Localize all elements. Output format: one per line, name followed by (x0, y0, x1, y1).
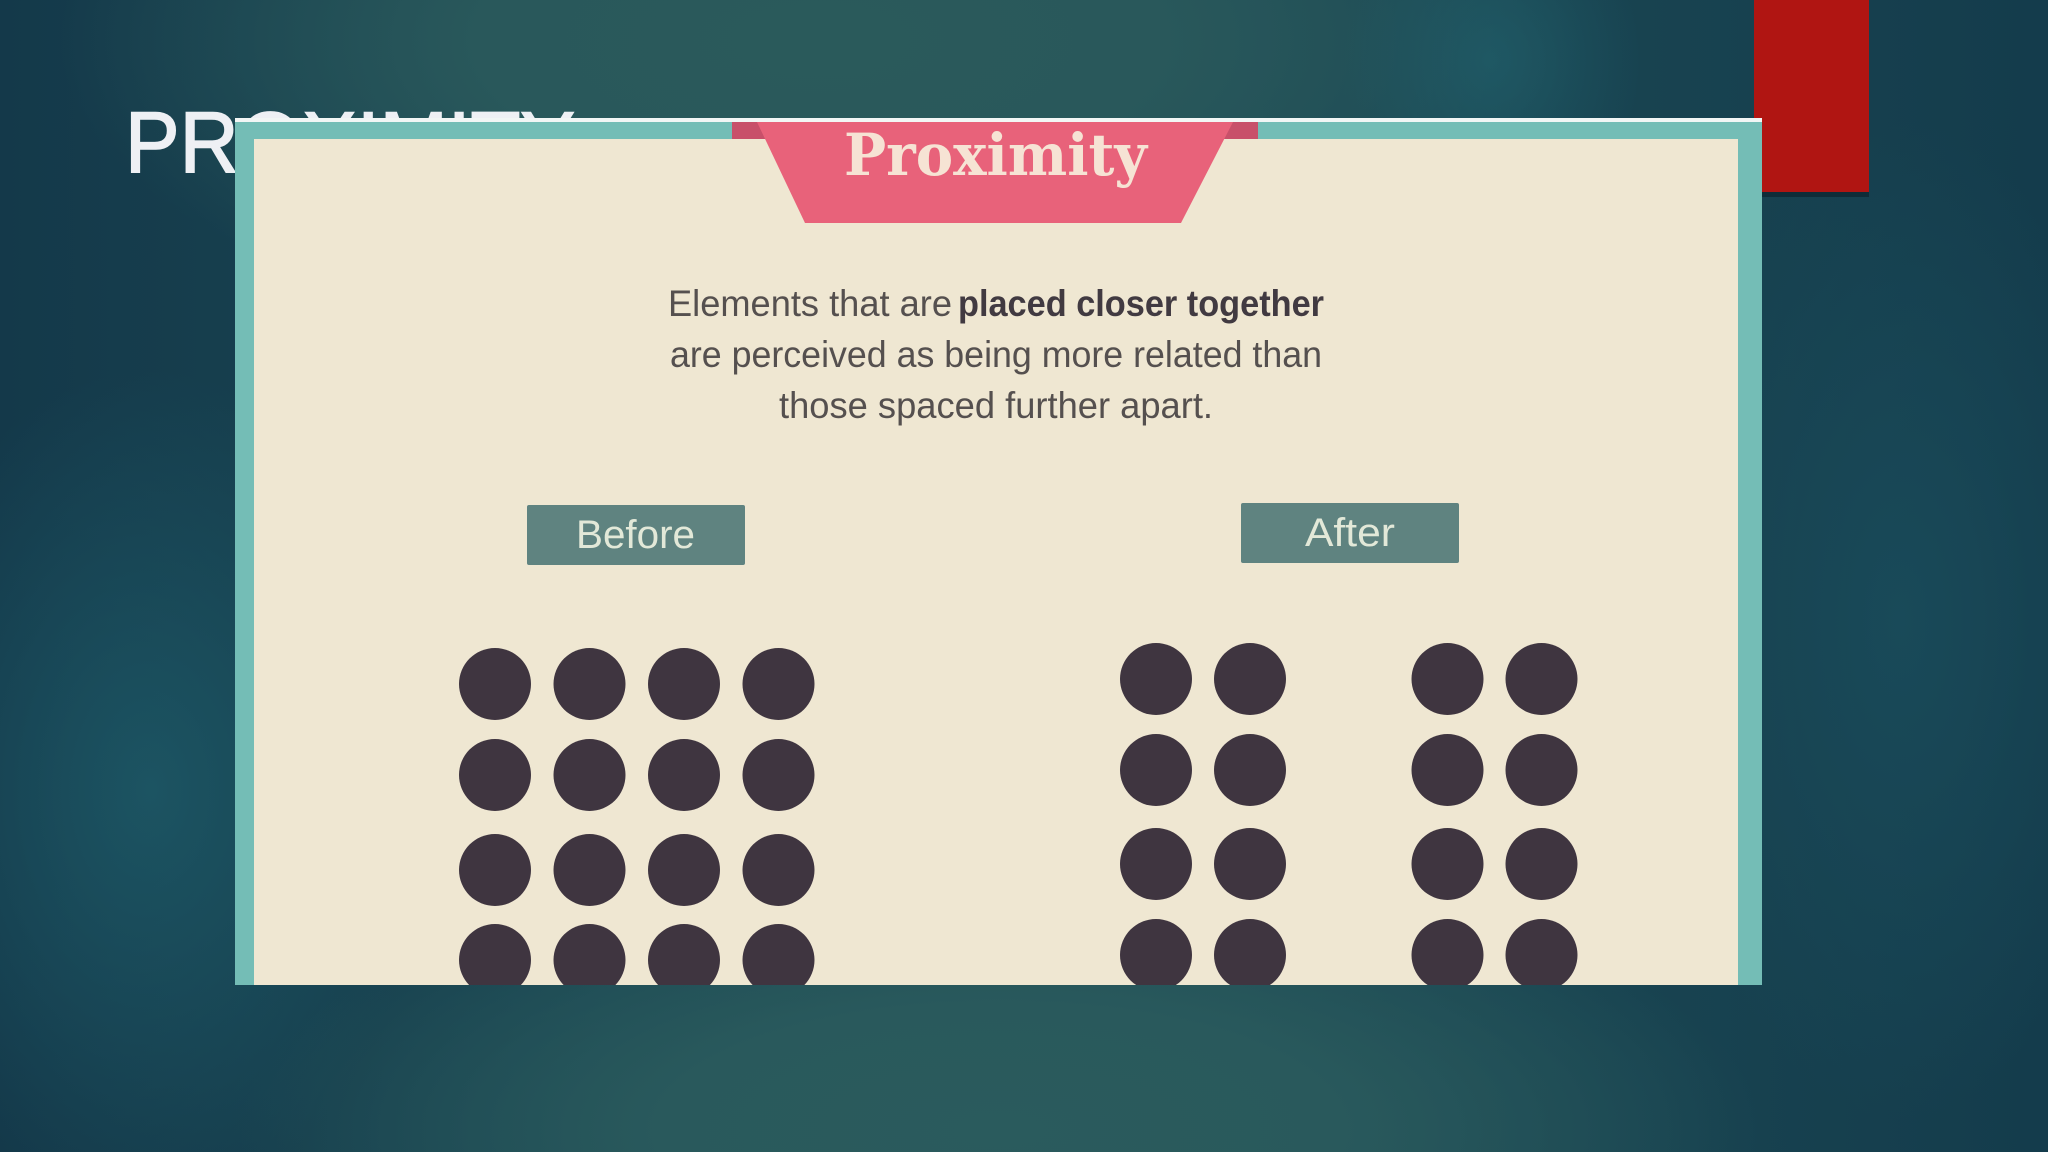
label: after: After (1305, 511, 1395, 555)
description text: those spaced further apart. (779, 385, 1213, 426)
description text: Elements that are (668, 283, 952, 324)
dot grid: after, grouped in two columns (1120, 643, 1578, 991)
label: before: Before (576, 513, 695, 557)
description text: are perceived as being more related than (670, 334, 1322, 375)
label: before (527, 505, 745, 565)
label: after (1241, 503, 1459, 563)
banner: heading ribbon (732, 121, 1258, 223)
description text: placed closer together (958, 283, 1324, 324)
panel frame (235, 118, 1762, 985)
slide title: PROXIMITY (125, 95, 575, 191)
description text (668, 283, 1324, 426)
dot grid: before, evenly spaced (459, 648, 814, 996)
slide canvas (130, 0, 1869, 985)
panel cream interior (254, 139, 1738, 985)
red accent tab (1754, 0, 1869, 197)
banner heading: Proximity (844, 121, 1149, 189)
panel: proximity card (235, 118, 1762, 996)
